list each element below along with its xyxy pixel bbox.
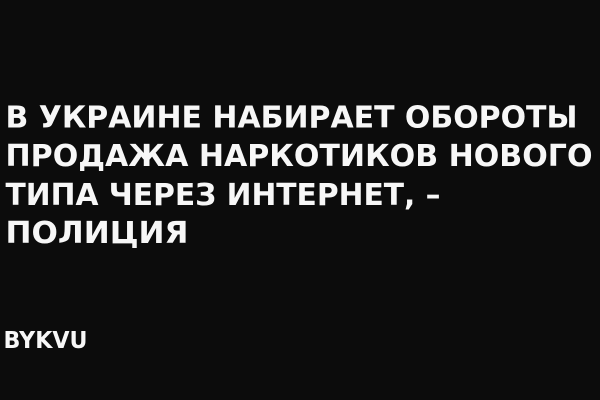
title: ПРОДАЖА НАРКОТИКОВ НОВОГО (6, 139, 592, 174)
title: ПОЛИЦИЯ (6, 216, 188, 251)
brand label: BYKVU (4, 326, 88, 354)
title: ТИПА ЧЕРЕЗ ИНТЕРНЕТ, – (6, 178, 440, 213)
title (6, 100, 592, 251)
title: В УКРАИНЕ НАБИРАЕТ ОБОРОТЫ (6, 100, 578, 136)
